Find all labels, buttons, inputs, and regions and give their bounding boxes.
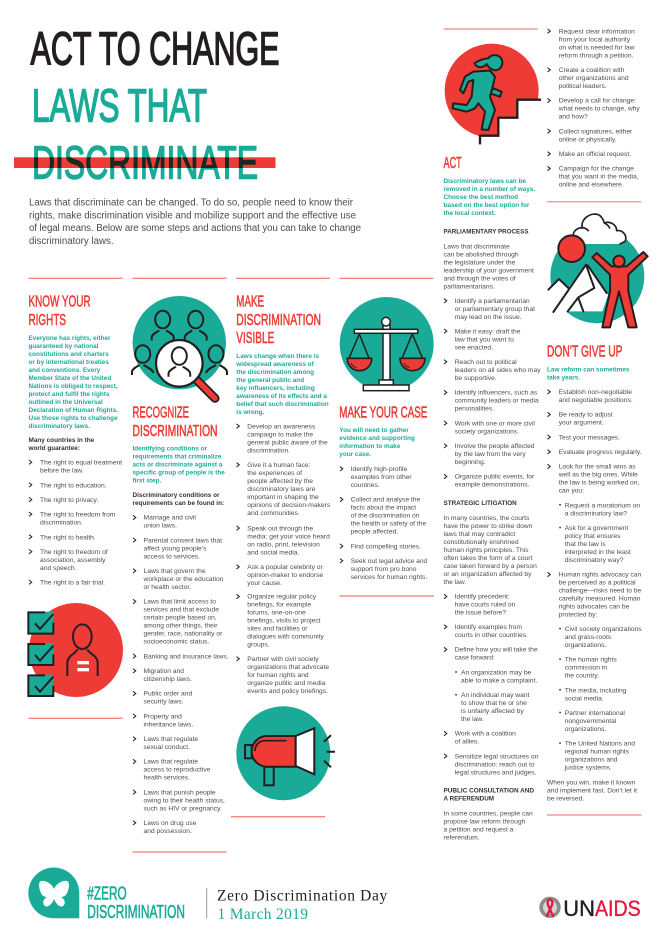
- list: laws: access to reproductive: [144, 767, 211, 774]
- intro: know your rights: Member State of the United: [28, 375, 111, 382]
- list: laws: Marriage and civil: [144, 515, 196, 522]
- intro: know your rights: discriminatory laws.: [28, 423, 90, 430]
- list: perseverance actions: Evaluate progress regularly.: [559, 449, 642, 456]
- intro: know your rights: Nations is obliged to respect,: [28, 383, 118, 390]
- list: laws: Parental consent laws that: [144, 537, 222, 544]
- footer: zero discrimination logo: DISCRIMINATION: [87, 901, 185, 922]
- heading: know your rights: [28, 294, 90, 329]
- intro: know your rights: and conventions. Every: [28, 367, 101, 374]
- list: laws: sexual conduct.: [144, 744, 190, 751]
- list: evidence actions: services for human rights.: [351, 574, 427, 581]
- text: public consultation: propose law reform through: [444, 819, 526, 826]
- list: laws: and possession.: [144, 828, 192, 835]
- list: litigation actions: courts in other countries.: [455, 632, 528, 639]
- list: litigation actions: discrimination: reach out to: [455, 761, 535, 768]
- list: parliamentary actions: beginning.: [455, 459, 486, 466]
- list: rights: [29, 460, 124, 587]
- list: act actions: that you want in the media,: [559, 174, 639, 181]
- list: parliamentary actions: personalities.: [455, 406, 494, 413]
- list: act actions: from your local authority: [559, 36, 631, 43]
- text: parliamentary process: parliamentarians.: [444, 283, 495, 290]
- list: perseverance actions: policy that ensures: [565, 533, 621, 540]
- list: perseverance actions: rights advocates can be: [559, 604, 630, 611]
- list: perseverance actions: that the law is: [565, 541, 606, 548]
- intro: make discrimination visible: awareness of its effects and a: [236, 393, 327, 400]
- text: closing note: be reversed.: [547, 795, 584, 802]
- heading: know your rights: KNOW YOUR: [28, 294, 90, 310]
- list: rights: before the law.: [40, 468, 84, 475]
- list: laws: socioeconomic status.: [144, 639, 209, 646]
- list: visibility actions: your cause.: [247, 580, 282, 587]
- list: visibility actions: Organize regular policy: [247, 594, 317, 601]
- list: evidence actions: examples from other: [351, 474, 412, 481]
- panel: make discrimination visible: [231, 278, 335, 817]
- list: laws: such as HIV or pregnancy.: [144, 805, 222, 812]
- text: strategic litigation: In many countries, the courts: [444, 515, 530, 522]
- intro: make your case: evidence and supporting: [339, 435, 415, 442]
- list: perseverance actions: can you:: [559, 488, 584, 495]
- heading: make your case: MAKE YOUR CASE: [339, 404, 427, 422]
- list: act actions: political leaders.: [559, 83, 607, 90]
- icon: person on mountain: [545, 214, 648, 327]
- list: litigation actions: to show that he or she: [461, 700, 527, 707]
- text: public consultation: In some countries, people can: [444, 811, 533, 818]
- panel: act: [444, 29, 543, 842]
- list: perseverance actions: Civil society organizations: [565, 626, 642, 633]
- heading: know your rights: RIGHTS: [28, 312, 66, 329]
- list: visibility actions: sites and facilities or: [247, 626, 308, 633]
- list: parliamentary actions: [444, 298, 542, 489]
- list: parliamentary actions: Reach out to political: [455, 359, 517, 366]
- list: laws: security laws.: [144, 699, 184, 706]
- list: perseverance actions: well as the big ones. While: [558, 472, 638, 479]
- intro: recognize discrimination: specific group of people is the: [132, 470, 225, 477]
- list: perseverance actions: Ask for a government: [565, 525, 628, 532]
- list: visibility actions: opinions of decision-makers: [247, 502, 331, 509]
- list: laws: Laws on drug use: [144, 820, 197, 827]
- list: visibility actions: events and policy briefings.: [247, 688, 328, 695]
- list: litigation actions: Sensitize legal structures on: [455, 753, 539, 760]
- list: perseverance actions: social media.: [565, 695, 604, 702]
- list: laws: Property and: [144, 713, 182, 720]
- list: visibility actions: and social media.: [247, 549, 299, 556]
- list: perseverance actions: Test your messages.: [559, 434, 620, 441]
- list: visibility actions: organize public and media: [247, 680, 326, 687]
- text: public consultation: a petition and request a: [444, 827, 514, 834]
- list: perseverance actions: protected by:: [559, 612, 598, 619]
- list: perseverance actions: a discriminatory law?: [565, 510, 627, 517]
- footer: zero discrimination logo: #ZERO: [87, 883, 127, 904]
- intro: act: the local context.: [444, 210, 496, 217]
- list: laws: citizenship laws.: [144, 676, 192, 683]
- intro: act: Choose the best method: [444, 194, 518, 201]
- list: perseverance actions: nongovernmental: [565, 718, 617, 725]
- list: parliamentary actions: example demonstrations.: [455, 482, 530, 489]
- list: evidence actions: countries.: [351, 482, 380, 489]
- intro: make your case: information to make: [339, 443, 401, 450]
- list: visibility actions: dialogues with community: [247, 634, 325, 641]
- list: visibility actions: [236, 423, 332, 695]
- list: visibility actions: discrimination.: [247, 447, 290, 454]
- list: visibility actions: Partner with civil society: [247, 656, 319, 663]
- list: perseverance actions: [548, 389, 644, 772]
- list: laws: affect young people’s: [144, 545, 207, 552]
- heading: recognize discrimination: DISCRIMINATION: [132, 423, 218, 440]
- list: laws: Laws that regulate: [144, 759, 198, 766]
- intro: make your case: You will need to gather: [339, 427, 409, 434]
- list: rights: The right to freedom from: [40, 512, 116, 519]
- list: evidence actions: Collect and analyse the: [351, 497, 421, 504]
- list: visibility actions: on radio, print, television: [247, 541, 320, 548]
- list: visibility actions: campaign to make the: [247, 431, 313, 438]
- list: parliamentary actions: may lead on the issue.: [455, 314, 522, 321]
- list: parliamentary actions: leaders on all sides who may: [455, 367, 541, 374]
- icon: magnifier over people: [132, 296, 227, 398]
- list: rights: The right to equal treatment: [40, 460, 122, 467]
- panel: recognize discrimination: [132, 278, 230, 852]
- footer: zero discrimination logo: [28, 868, 185, 922]
- list: evidence actions: people affected.: [351, 529, 398, 536]
- icon: scales of justice: [340, 297, 434, 391]
- intro: know your rights: constitutions and charters: [28, 351, 109, 358]
- title: LAWS THAT: [32, 80, 207, 132]
- list: evidence actions: facts about the impact: [351, 505, 416, 512]
- subheading: many countries: world guarantee:: [28, 445, 80, 452]
- list: litigation actions: legal structures and judges.: [455, 769, 537, 776]
- list: visibility actions: groups.: [247, 642, 270, 649]
- list: visibility actions: Develop an awareness: [247, 423, 316, 430]
- list: perseverance actions: organizations.: [565, 642, 606, 649]
- list: act actions: Make an official request.: [559, 151, 631, 158]
- list: visibility actions: important in shaping the: [247, 494, 319, 501]
- intro: act: based on the best option for: [444, 202, 530, 209]
- heading: make discrimination visible: DISCRIMINATION: [236, 312, 321, 329]
- text: strategic litigation: often takes the form of a court: [444, 555, 532, 562]
- text: strategic litigation: laws that may contradict: [444, 531, 515, 538]
- intro: don't give up: take years.: [547, 374, 580, 381]
- list: laws: gender, race, nationality or: [144, 631, 223, 638]
- list: rights: The right to a fair trial.: [40, 580, 105, 587]
- list: rights: The right to health.: [40, 534, 96, 541]
- list: act actions: on what is needed for law: [559, 44, 635, 51]
- list: act actions: online and elsewhere.: [559, 182, 624, 189]
- intro: know your rights: or by international treaties: [28, 359, 109, 366]
- list: visibility actions: discriminatory laws are: [247, 486, 316, 493]
- list: parliamentary actions: see enacted.: [455, 344, 493, 351]
- text: parliamentary process: Laws that discriminate: [444, 243, 510, 250]
- list: laws: among other things, their: [144, 623, 218, 630]
- icon: butterfly: [39, 881, 69, 907]
- subheading: parliamentary process: PARLIAMENTARY PROCESS: [444, 228, 529, 235]
- intro: act: removed in a number of ways.: [444, 186, 535, 193]
- list: parliamentary actions: by the law from the very: [455, 451, 526, 458]
- list: perseverance actions: commission in: [565, 665, 607, 672]
- list: rights: The right to privacy.: [40, 497, 98, 504]
- list: perseverance actions: the country.: [565, 673, 599, 680]
- intro: make your case: your case.: [339, 451, 371, 458]
- intro: recognize discrimination: first step.: [132, 478, 161, 485]
- list: visibility actions: briefings, for example: [247, 602, 312, 609]
- list: visibility actions: opinion-maker to endorse: [247, 572, 323, 579]
- list: laws: Laws that regulate: [144, 736, 198, 743]
- list: laws: Public order and: [144, 691, 192, 698]
- list: perseverance actions: be perceived as a political: [559, 580, 636, 587]
- panel: know your rights: [28, 278, 124, 718]
- list: litigation actions: is unfairly affected by: [461, 708, 524, 715]
- panel: act continued and don't give up: [545, 28, 648, 815]
- list: litigation actions: Identify examples from: [455, 624, 522, 631]
- intro: make discrimination visible: is wrong.: [236, 409, 265, 416]
- list: perseverance actions: challenge—risks need to be: [559, 588, 642, 595]
- list: laws: health services.: [144, 775, 190, 782]
- list: parliamentary actions: law that you want to: [455, 336, 514, 343]
- list: parliamentary actions: Make it easy: draft the: [455, 328, 521, 335]
- list: evidence actions: the health or safety of the: [351, 521, 426, 528]
- footer: event name and date: Zero Discrimination Day: [217, 888, 388, 905]
- list: perseverance actions: The United Nations and: [565, 741, 635, 748]
- list: visibility actions: for human rights and: [247, 672, 309, 679]
- subheading: public consultation: A REFERENDUM: [444, 796, 494, 803]
- heading: recognize discrimination: [132, 404, 218, 440]
- list: laws: Laws that punish people: [144, 789, 216, 796]
- list: laws: services and that exclude: [144, 607, 219, 614]
- list: parliamentary actions: Involve the people affected: [455, 443, 535, 450]
- list: perseverance actions: The human rights: [565, 657, 617, 664]
- list: evidence actions: support from pro bono: [351, 566, 417, 573]
- list: laws: union laws.: [144, 523, 177, 530]
- list: visibility actions: general public aware of the: [247, 439, 328, 446]
- text: parliamentary process: and through the votes of: [444, 275, 516, 282]
- list: act actions: and how?: [559, 114, 588, 121]
- list: act actions: Collect signatures, either: [559, 128, 633, 135]
- list: litigation actions: Define how you will take the: [455, 647, 538, 654]
- list: laws: workplace or the education: [142, 576, 224, 583]
- list: perseverance actions: and grass-roots: [565, 634, 612, 641]
- heading: act: ACT: [444, 155, 462, 172]
- intro: know your rights: Use those rights to challenge: [28, 415, 118, 422]
- list: act actions: online or physically.: [559, 136, 617, 143]
- text: public consultation: referendum.: [444, 835, 480, 842]
- list: perseverance actions: Be ready to adjust: [559, 412, 613, 419]
- list: rights: The right to education.: [40, 482, 107, 489]
- text: closing note: and implement fast. Don’t let it: [547, 787, 637, 794]
- intro: make discrimination visible: belief that such discrimination: [236, 401, 329, 408]
- list: perseverance actions: Look for the small wins as: [559, 464, 636, 471]
- intro: don't give up: Law reform can sometimes: [547, 366, 630, 373]
- list: visibility actions: Speak out through the: [247, 525, 313, 532]
- list: perseverance actions: justice systems.: [564, 765, 612, 772]
- list: perseverance actions: Establish non-negotiable: [559, 389, 632, 396]
- list: perseverance actions: Partner international: [565, 710, 625, 717]
- intro: act: Discriminatory laws can be: [444, 178, 526, 185]
- intro: recognize discrimination: acts or discriminate against a: [132, 462, 223, 469]
- subheading: discriminatory conditions: requirements can be found in:: [132, 500, 224, 507]
- heading: make discrimination visible: [236, 294, 321, 347]
- text: strategic litigation: constitutionally enshrined: [444, 539, 519, 546]
- list: perseverance actions: organizations and: [565, 757, 618, 764]
- list: evidence actions: Identify high-profile: [351, 466, 407, 473]
- list: act actions: [548, 28, 642, 189]
- subheading: strategic litigation: STRATEGIC LITIGATION: [444, 500, 517, 507]
- list: parliamentary actions: Identify a parliamentarian: [455, 298, 530, 305]
- list: visibility actions: forums, one-on-one: [247, 610, 306, 617]
- text: strategic litigation: or an organization affected by: [444, 571, 532, 578]
- list: perseverance actions: carefully measured. Human: [559, 596, 641, 603]
- list: visibility actions: Give it a human face:: [247, 462, 311, 469]
- intro: know your rights: Declaration of Human Rights.: [28, 407, 118, 414]
- list: act actions: other organizations and: [559, 75, 629, 82]
- text: strategic litigation: human rights principles. This: [444, 547, 529, 554]
- list: litigation actions: have courts ruled on: [455, 602, 516, 609]
- panel: make your case: [339, 278, 434, 596]
- list: rights: discrimination.: [40, 520, 83, 527]
- footer: event name and date: 1 March 2019: [218, 906, 308, 923]
- list: laws: owing to their health status,: [144, 797, 225, 804]
- list: perseverance actions: discriminatory way?: [565, 557, 624, 564]
- intro: make discrimination visible: the general public and: [236, 377, 304, 384]
- list: laws: Migration and: [144, 668, 184, 675]
- list: laws: inheritance laws.: [144, 721, 193, 728]
- list: perseverance actions: and negotiable positions.: [559, 397, 633, 404]
- list: visibility actions: organizations that advocate: [247, 664, 329, 671]
- title: [14, 22, 280, 189]
- list: perseverance actions: interpreted in the least: [565, 549, 631, 556]
- intro: make discrimination visible: widespread awareness of: [235, 361, 315, 368]
- heading: make discrimination visible: VISIBLE: [236, 330, 274, 347]
- list: visibility actions: the experiences of: [247, 470, 302, 477]
- list: visibility actions: and communities.: [247, 510, 300, 517]
- list: laws: certain people based on,: [144, 615, 217, 622]
- list: parliamentary actions: or parliamentary group that: [455, 306, 535, 313]
- list: parliamentary actions: be supportive.: [455, 375, 497, 382]
- list: rights: association, assembly: [40, 557, 106, 564]
- list: perseverance actions: Human rights advocacy can: [559, 572, 642, 579]
- list: litigation actions: the issue before?: [455, 610, 506, 617]
- list: litigation actions: case forward:: [455, 655, 495, 662]
- list: litigation actions: An individual may want: [461, 692, 530, 699]
- intro: know your rights: outlined in the Universal: [28, 399, 103, 406]
- intro: know your rights: guaranteed by national: [28, 343, 99, 350]
- intro: know your rights: Everyone has rights, either: [28, 335, 111, 342]
- list: evidence actions: Find compelling stories.: [351, 543, 421, 550]
- list: parliamentary actions: Identify influencers, such as: [455, 390, 538, 397]
- list: laws: or health sector.: [144, 584, 191, 591]
- intro: make discrimination visible: Laws change when there is: [236, 353, 319, 360]
- list: visibility actions: people affected by the: [247, 478, 313, 485]
- text: closing note: When you win, make it known: [547, 779, 636, 786]
- heading: make discrimination visible: MAKE: [236, 294, 264, 310]
- list: visibility actions: Ask a popular celebrity or: [247, 564, 324, 571]
- list: litigation actions: [444, 594, 540, 776]
- list: visibility actions: media: get your voice heard: [247, 533, 330, 540]
- footer: UNAIDS logo: AIDS: [595, 896, 641, 921]
- list: litigation actions: Identify precedent:: [455, 594, 510, 601]
- list: evidence actions: [340, 466, 429, 581]
- list: act actions: what needs to change, why: [558, 106, 640, 113]
- subheading: many countries: Many countries in the: [28, 437, 95, 444]
- intro: recognize discrimination: Identifying conditions or: [132, 446, 208, 453]
- text: parliamentary process: can be abolished through: [444, 251, 519, 258]
- footer: UNAIDS logo: UN: [563, 896, 595, 921]
- heading: recognize discrimination: RECOGNIZE: [132, 404, 189, 422]
- title: ACT TO CHANGE: [30, 22, 280, 74]
- list: rights: The right to freedom of: [40, 549, 108, 556]
- subheading: discriminatory conditions: Discriminatory conditions or: [132, 492, 220, 499]
- text: parliamentary process: leadership of your government: [444, 267, 534, 274]
- text: strategic litigation: the law.: [444, 579, 466, 586]
- list: act actions: Campaign for the change: [559, 166, 634, 173]
- list: rights: and speech.: [40, 565, 77, 572]
- subheading: public consultation: PUBLIC CONSULTATION AND: [444, 788, 534, 795]
- list: evidence actions: of the discrimination on: [351, 513, 420, 520]
- list: laws: Laws that govern the: [144, 568, 206, 575]
- intro: make discrimination visible: the discrimination among: [236, 369, 314, 376]
- list: act actions: Request clear information: [559, 28, 635, 35]
- text: parliamentary process: the legislature under the: [444, 259, 516, 266]
- list: perseverance actions: organizations.: [565, 726, 606, 733]
- list: parliamentary actions: community leaders or media: [455, 398, 539, 405]
- text: strategic litigation: have the power to strike down: [444, 523, 533, 530]
- list: parliamentary actions: Work with one or more civil: [455, 420, 535, 427]
- intro: know your rights: protect and fulfil the rights: [28, 391, 110, 398]
- list: perseverance actions: The media, including: [565, 687, 627, 694]
- intro text: Laws that discriminate can be changed. To do so, people need to know their: [29, 198, 354, 208]
- list: parliamentary actions: society organizations.: [455, 428, 519, 435]
- list: perseverance actions: your argument.: [559, 420, 604, 427]
- icon: runner on stairs: [445, 44, 543, 147]
- intro text: rights, make discrimination visible and mobilize support and the effective use: [29, 210, 356, 221]
- list: litigation actions: the law.: [461, 716, 484, 723]
- list: litigation actions: Work with a coalition: [455, 731, 516, 738]
- icon: person with checklist: [28, 603, 123, 697]
- title: DISCRIMINATE: [32, 137, 258, 189]
- list: evidence actions: Seek out legal advice and: [351, 558, 428, 565]
- list: laws: Banking and insurance laws.: [144, 653, 229, 660]
- list: parliamentary actions: Organize public events, for: [455, 474, 535, 481]
- list: act actions: Create a coalition with: [559, 67, 625, 74]
- list: act actions: Develop a call for change:: [559, 98, 636, 105]
- intro text: of legal means. Below are some steps and actions that you can take to change: [29, 223, 361, 234]
- intro: recognize discrimination: requirements that criminalize: [132, 454, 222, 461]
- icon: megaphone: [236, 706, 335, 800]
- list: laws: [133, 515, 230, 835]
- list: visibility actions: briefings, visits to project: [247, 618, 321, 625]
- list: act actions: reform through a petition.: [559, 52, 634, 59]
- list: perseverance actions: regional human rights: [565, 749, 630, 756]
- list: litigation actions: able to make a complaint.: [461, 677, 537, 684]
- list: litigation actions: An organization may be: [461, 669, 532, 676]
- list: laws: Laws that limit access to: [144, 599, 216, 606]
- text: strategic litigation: case taken forward by a person: [444, 563, 537, 570]
- intro: make discrimination visible: key influencers, including: [236, 385, 315, 392]
- list: litigation actions: of allies.: [455, 739, 479, 746]
- footer: UNAIDS logo: [539, 896, 641, 921]
- intro text: discriminatory laws.: [29, 236, 114, 247]
- list: perseverance actions: Request a moratorium on: [565, 502, 640, 509]
- heading: don't give up: DON’T GIVE UP: [547, 344, 622, 360]
- list: laws: access to services.: [144, 553, 200, 560]
- list: perseverance actions: the law is being worked on,: [559, 480, 640, 487]
